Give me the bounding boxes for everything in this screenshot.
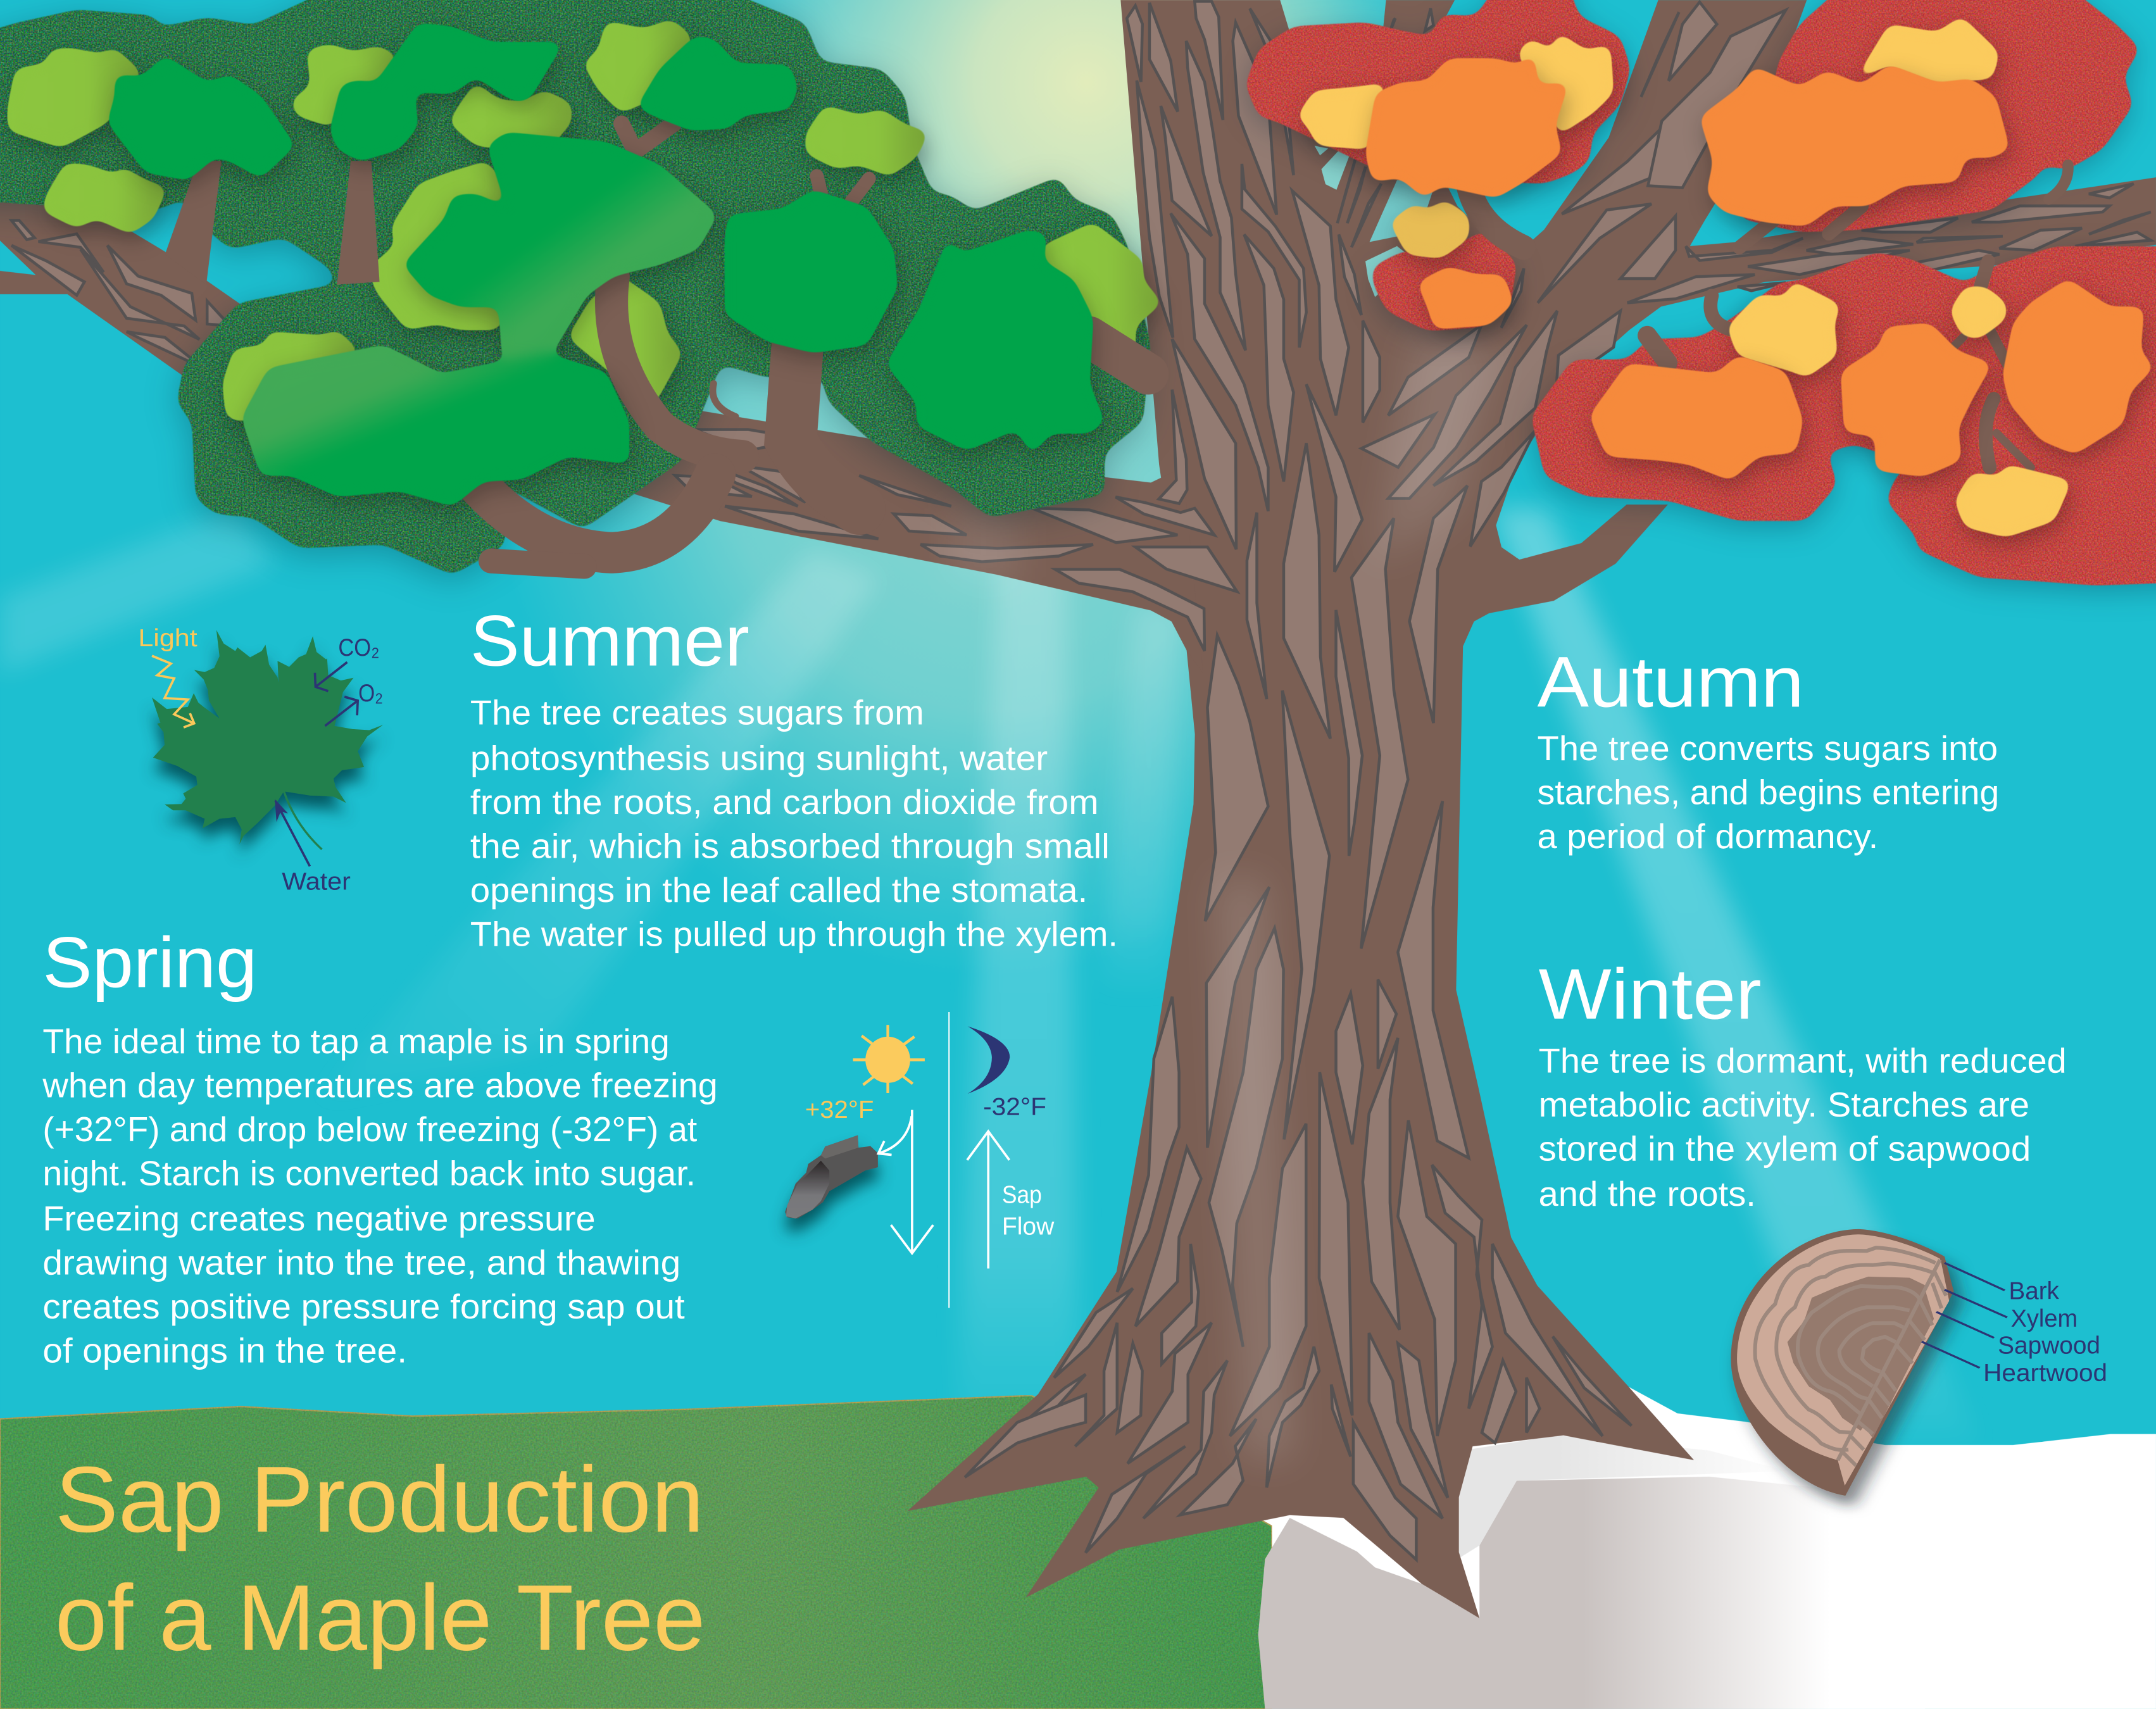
text block: Summer: from the roots, and carbon dioxide from	[470, 783, 1099, 822]
heading: Winter: Winter	[1539, 955, 1762, 1034]
label: O2: O₂	[358, 680, 383, 707]
label: light: Light	[138, 625, 197, 652]
autumn canopy: orange leaves	[1365, 54, 2154, 480]
text block: Autumn: a period of dormancy.	[1538, 817, 1878, 856]
label: Sap Flow: Flow	[1002, 1213, 1055, 1241]
icon: sun	[853, 1025, 925, 1093]
summer twigs	[165, 123, 1148, 567]
sky gaps between trunk and branches	[1315, 146, 1437, 297]
bark plates: lower trunk	[965, 801, 1631, 1560]
heartwood	[1788, 1277, 1934, 1438]
arrow: sap flowing down	[891, 1110, 933, 1253]
divider	[947, 1012, 951, 1308]
trunk with roots and right branches	[908, 0, 2156, 1618]
far left branch	[0, 172, 242, 377]
autumn canopy: yellow leaves	[1296, 16, 2072, 537]
text block: Spring: of openings in the tree.	[42, 1332, 407, 1370]
text block: Summer: the air, which is absorbed through small	[470, 827, 1110, 865]
growth rings	[1755, 1248, 1946, 1465]
label: CO2: CO₂	[338, 634, 380, 661]
text block: Summer: The water is pulled up through the xylem.	[470, 915, 1118, 953]
label: -32F: -32°F	[983, 1094, 1046, 1121]
text block: Spring: The ideal time to tap a maple is in spring	[42, 1022, 670, 1061]
main left branch	[550, 410, 1203, 673]
label: Sap Flow: Sap	[1002, 1182, 1042, 1209]
label: +32F: +32°F	[805, 1096, 874, 1124]
bark plates: middle trunk	[1055, 191, 1557, 1139]
text block: Summer: openings in the leaf called the stomata.	[470, 871, 1087, 910]
bark plates: left branches	[11, 220, 1177, 562]
arrow: into spile	[879, 1116, 912, 1155]
light rays over the bark	[949, 330, 1499, 1457]
title: Sap Production	[55, 1448, 704, 1552]
text block: Spring: (+32°F) and drop below freezing (-32°F) at	[42, 1110, 697, 1149]
label: Heartwood: Heartwood	[1983, 1360, 2107, 1387]
summer canopy: mid green leaves	[108, 23, 1105, 506]
text block: Summer: The tree creates sugars from	[470, 694, 924, 732]
icon: spile	[785, 1135, 878, 1218]
light rays	[0, 509, 1980, 1444]
label: Bark: Bark	[2009, 1278, 2059, 1305]
icon: maple leaf	[152, 630, 383, 867]
sap flow diagram	[785, 1012, 1055, 1308]
label: Xylem: Xylem	[2011, 1305, 2078, 1332]
tree cross section	[1731, 1229, 2107, 1496]
text block: Winter: stored in the xylem of sapwood	[1539, 1129, 2031, 1168]
text block: Autumn: starches, and begins entering	[1538, 773, 1999, 812]
text block: Spring: drawing water into the tree, and thawing	[42, 1244, 680, 1282]
leader lines	[1922, 1263, 2007, 1368]
grass	[0, 1396, 1272, 1709]
label: water: Water	[282, 868, 351, 895]
text block: Spring: creates positive pressure forcing sap out	[42, 1287, 685, 1326]
text block: Spring: night. Starch is converted back into sugar.	[42, 1154, 696, 1193]
rock	[1258, 1436, 1925, 1709]
bark plates: right branches	[1538, 2, 2151, 387]
heading: Autumn: Autumn	[1538, 642, 1804, 722]
text block: Autumn: The tree converts sugars into	[1538, 729, 1998, 768]
text block: Winter: The tree is dormant, with reduced	[1539, 1041, 2067, 1080]
soft glow below the sun	[468, 0, 1512, 990]
summer canopy: light green leaves	[8, 19, 1162, 422]
bark	[1731, 1229, 1953, 1496]
autumn twigs	[1469, 165, 2068, 468]
text block: Summer: photosynthesis using sunlight, water	[470, 739, 1048, 777]
title: of a Maple Tree	[55, 1566, 705, 1670]
photosynthesis diagram	[138, 625, 383, 895]
sun glow	[715, 0, 1458, 454]
label: Sapwood: Sapwood	[1998, 1332, 2100, 1359]
snow	[1258, 1361, 2156, 1709]
bark plates: upper trunk	[1127, 1, 1524, 351]
text block: Spring: when day temperatures are above freezing	[42, 1066, 718, 1105]
heading: Summer: Summer	[470, 601, 749, 680]
text block: Winter: and the roots.	[1539, 1175, 1756, 1213]
icon: moon	[968, 1026, 1010, 1094]
summer canopy: dark foliage	[0, 0, 1151, 575]
autumn canopy: red foliage	[1245, 0, 2156, 585]
heading: Spring: Spring	[42, 923, 257, 1003]
sapwood	[1737, 1234, 1949, 1486]
text block: Winter: metabolic activity. Starches are	[1539, 1086, 2029, 1124]
arrow: sap flowing up	[967, 1131, 1010, 1268]
text block: Spring: Freezing creates negative pressure	[42, 1199, 596, 1238]
